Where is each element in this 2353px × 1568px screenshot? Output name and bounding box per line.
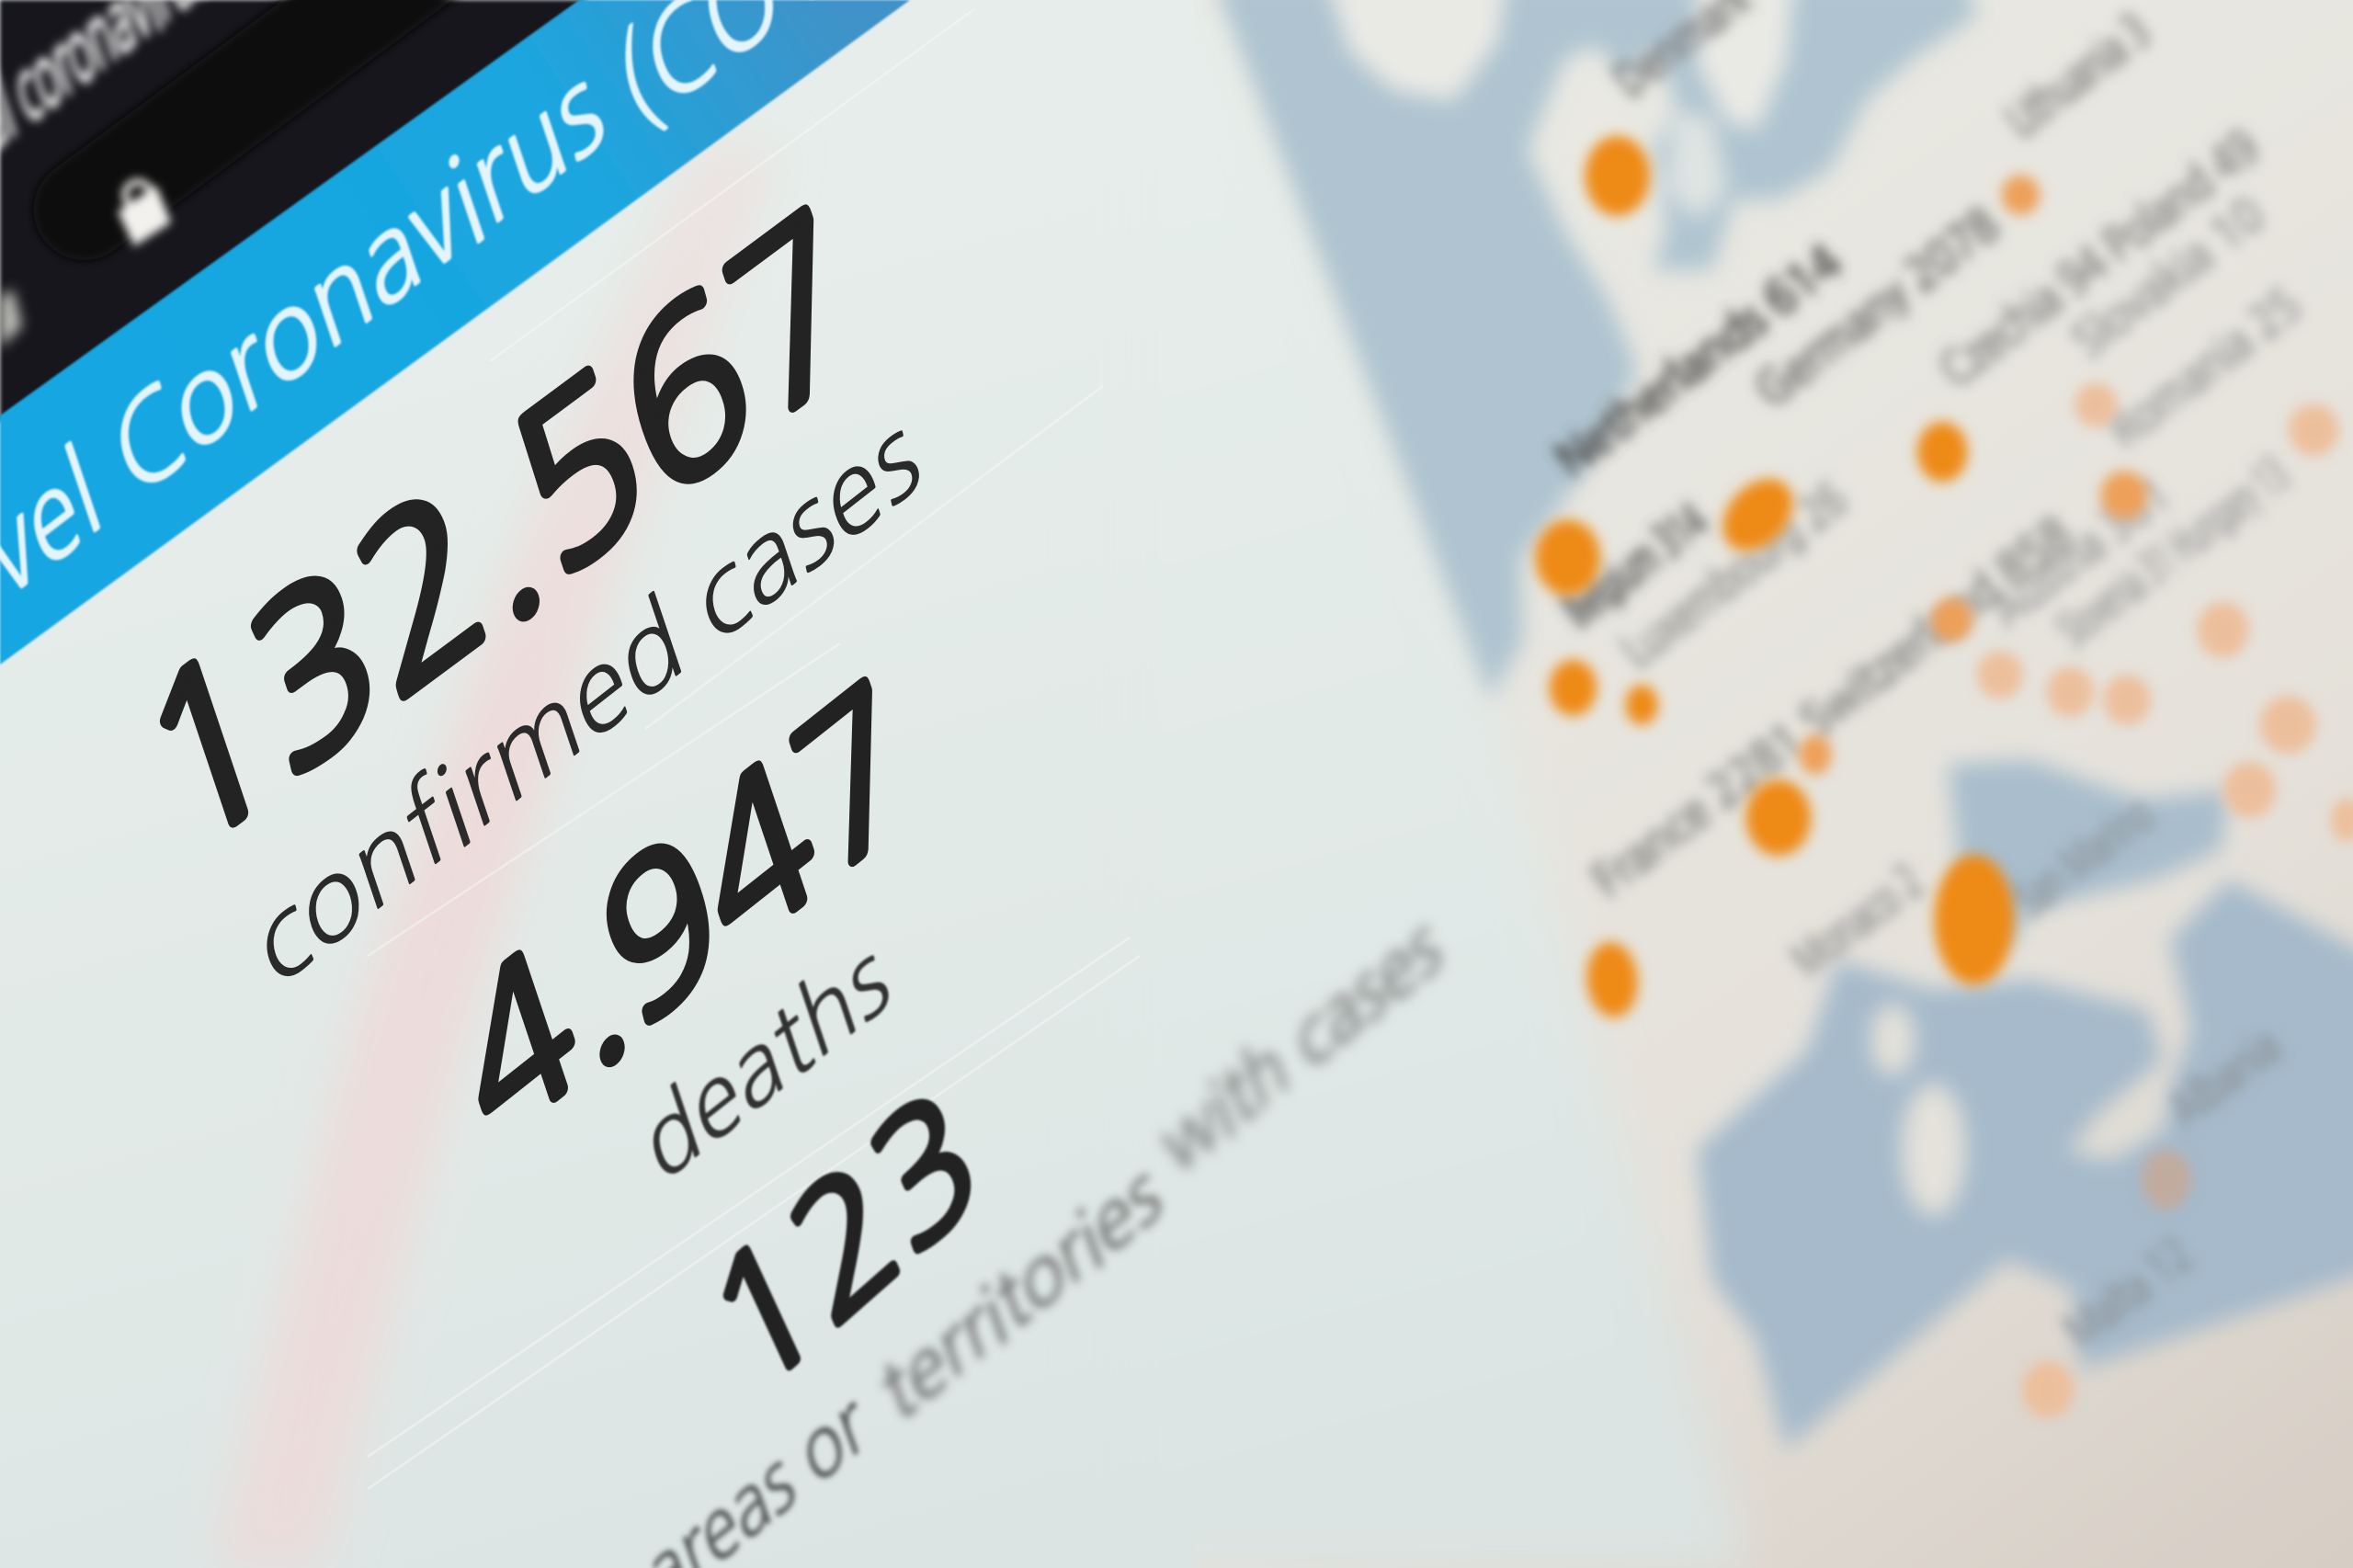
label: Monaco: Monaco 2 bbox=[1784, 858, 1930, 984]
browser toolbar black bar bbox=[0, 0, 588, 423]
map: blurred country labels bbox=[1548, 0, 2309, 1355]
label: Slovakia: Slovakia 10 bbox=[2064, 191, 2272, 365]
label: Netherlands: Netherlands 614 bbox=[1548, 238, 1849, 483]
label: Greece: Albania bbox=[2161, 1022, 2289, 1134]
pink screen reflection stripe bbox=[211, 147, 781, 1568]
bubble: muted case over sea bbox=[2141, 1150, 2191, 1210]
label: confirmed cases: confirmed cases bbox=[244, 394, 931, 1006]
panel divider lines bbox=[368, 9, 1140, 1489]
label: Ukraine: Romania 25 bbox=[2101, 281, 2309, 455]
label: San Marino: San Marino bbox=[2006, 790, 2162, 925]
stat: 4.947 deaths bbox=[439, 651, 931, 1199]
bubble: strong orange cases bbox=[1535, 136, 2014, 1027]
map: case bubbles bbox=[1535, 136, 2353, 1417]
label: Luxembourg: Luxembourg 26 bbox=[1614, 476, 1855, 675]
number: 132.567: 132.567 bbox=[121, 175, 881, 892]
bubble: medium cases bbox=[1799, 175, 2148, 775]
label part: with cases: with cases bbox=[1154, 903, 1449, 1187]
bubble: pale cases bbox=[1977, 383, 2353, 1417]
label: Germany: Germany 2078 bbox=[1747, 201, 2006, 415]
map: sea and land shapes bbox=[1213, 0, 2353, 1449]
label: Belgium: Belgium 314 bbox=[1555, 497, 1715, 634]
title word: Coronavirus: Coronavirus bbox=[101, 44, 615, 518]
label: Austria: Austria 361 bbox=[1984, 471, 2178, 634]
number: 4.947: 4.947 bbox=[439, 651, 931, 1174]
stat: 132.567 confirmed cases bbox=[121, 175, 931, 1006]
label: deaths: deaths bbox=[634, 923, 899, 1199]
stat: 123 areas or territories with cases bbox=[638, 903, 1449, 1568]
label part: territories: territories bbox=[873, 1149, 1169, 1436]
label: Czechia: Czechia 94 Poland 49 bbox=[1932, 123, 2267, 394]
icon: lock bbox=[118, 182, 171, 246]
label: Malta: Malta 12 bbox=[2057, 1231, 2200, 1355]
icon: blurred toolbar button bbox=[0, 290, 22, 347]
header title: Novel Coronavirus (COVID-19) bbox=[0, 0, 1092, 699]
address bar pill bbox=[14, 0, 635, 280]
label: France: France 2281 Switzerland 858 bbox=[1585, 510, 2080, 904]
number: 123: 123 bbox=[689, 1062, 1000, 1425]
blue header band bbox=[0, 0, 910, 665]
panel: statistics background bbox=[0, 0, 1746, 1568]
